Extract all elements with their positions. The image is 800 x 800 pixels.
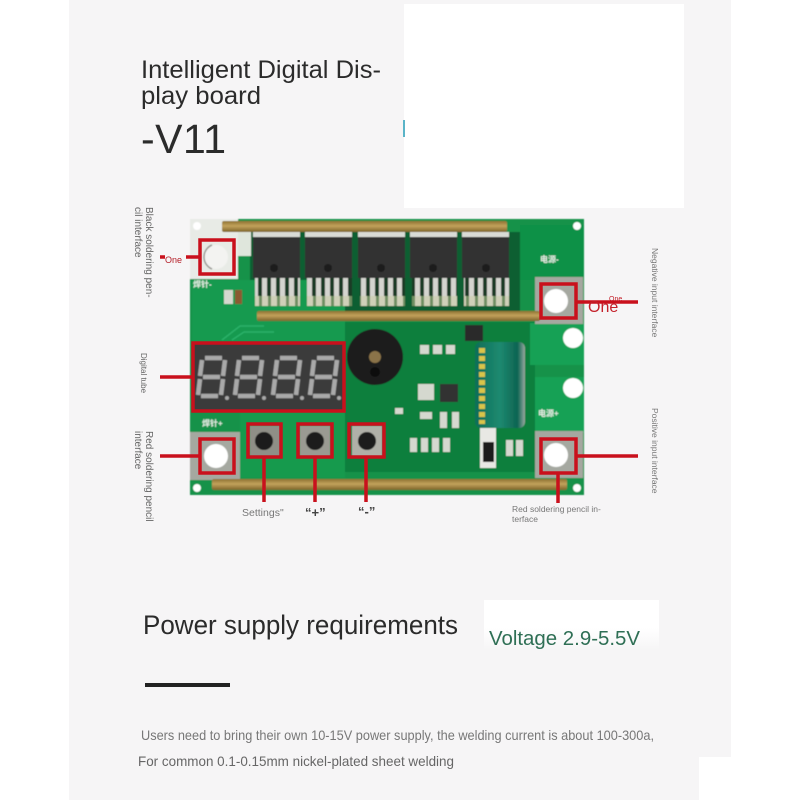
red annotation frames and leader lines <box>160 240 638 503</box>
label: red soldering pencil interface right: Red soldering pencil in- <box>512 504 601 514</box>
gold bar bottom <box>212 479 567 490</box>
buzzer <box>347 329 403 385</box>
chips <box>224 290 523 468</box>
top left white pad <box>190 219 238 279</box>
body text <box>138 727 654 769</box>
title: play board <box>141 82 261 110</box>
label: one right: One <box>609 296 622 303</box>
voltage text: Voltage 2.9-5.5V <box>489 628 641 650</box>
dark band behind transistors <box>250 232 520 312</box>
label: black soldering pencil interface: Black soldering pen- <box>143 207 154 298</box>
connector holes <box>204 245 583 468</box>
buttons <box>250 426 382 456</box>
label: settings: Settings" <box>242 507 284 519</box>
band to right of transistors <box>520 225 584 280</box>
label: minus: “-” <box>358 504 375 519</box>
gold bar middle <box>257 311 540 321</box>
silkscreen labels: 电源+ <box>538 408 559 418</box>
capacitor <box>475 342 525 428</box>
right copper fills <box>530 323 584 365</box>
label: red soldering pencil interface right: terface <box>512 514 538 524</box>
lower left strip <box>240 412 345 478</box>
transistors <box>253 232 509 306</box>
white patch behind voltage <box>484 600 659 650</box>
label: one left: One <box>165 255 182 265</box>
label: positive input interface: Positive input interface <box>650 408 660 494</box>
white patch bottom right <box>699 757 731 800</box>
heading: power supply: Power supply requirements <box>143 610 458 640</box>
label: digital tube: Digital tube <box>139 353 148 394</box>
body text: For common 0.1-0.15mm nickel-plated sheet welding <box>138 753 454 769</box>
label: red soldering pencil interface right <box>512 504 601 524</box>
circuit board <box>190 219 584 495</box>
label: red soldering pencil interface left: Red soldering pencil <box>143 431 154 522</box>
silkscreen labels <box>193 254 559 428</box>
pad: top right <box>535 277 583 324</box>
lower central zone <box>345 322 535 472</box>
label: red soldering pencil interface left <box>132 431 154 522</box>
title: -V11 <box>141 116 226 162</box>
label: black soldering pencil interface: cil interface <box>132 207 143 258</box>
white patch top right <box>404 4 684 208</box>
label: red soldering pencil interface left: interface <box>132 431 143 470</box>
title <box>141 56 381 162</box>
gold bar top <box>222 221 507 232</box>
label: plus: “+” <box>305 505 326 520</box>
short heading rule <box>145 683 230 687</box>
title: Intelligent Digital Dis- <box>141 56 381 84</box>
label: black soldering pencil interface <box>132 207 154 298</box>
pad: bottom right <box>535 431 583 478</box>
pcb base <box>190 219 584 495</box>
digital tube display <box>192 342 345 412</box>
label: negative input interface: Negative input interface <box>650 248 660 338</box>
silkscreen labels: 焊针- <box>193 279 212 289</box>
pad: bottom left <box>190 432 240 480</box>
trace zone left <box>192 280 345 342</box>
small blue mark <box>403 120 405 137</box>
body text: Users need to bring their own 10-15V power supply, the welding current is about 100-300a, <box>141 727 654 743</box>
silkscreen labels: 焊针+ <box>202 418 223 428</box>
silkscreen labels: 电源- <box>540 254 559 264</box>
label: one right: One <box>588 299 618 316</box>
mounting holes <box>193 222 581 492</box>
